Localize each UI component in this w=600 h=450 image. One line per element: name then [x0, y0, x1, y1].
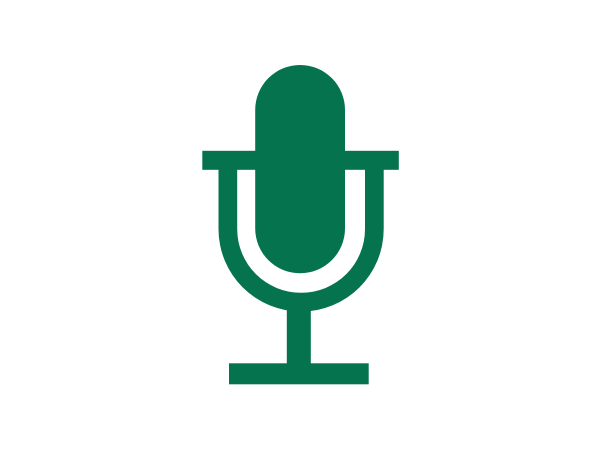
cradle	[218, 169, 384, 312]
stand base	[229, 363, 369, 384]
stand stem	[287, 305, 311, 365]
crossbar	[202, 151, 399, 170]
microphone capsule	[255, 65, 345, 273]
